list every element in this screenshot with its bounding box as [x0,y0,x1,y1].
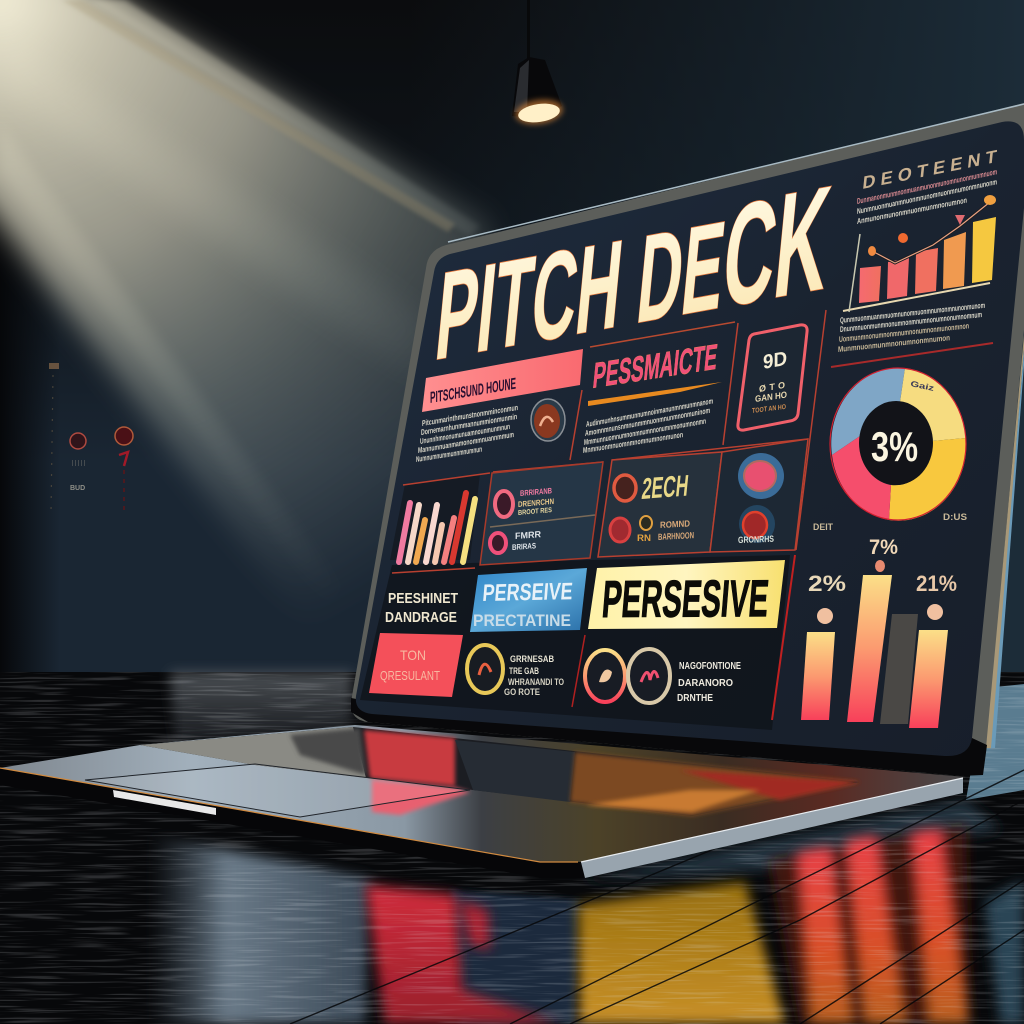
panel: phone stat card: ØTO [759,380,785,394]
label: pessimist text [385,590,458,626]
panel dividers [392,310,826,720]
bottom bar chart [801,536,957,728]
line and bar chart [843,195,996,312]
notch highlight [113,790,216,815]
body text: Pitcunmarinthmunstnonmminconmun [422,403,518,428]
panel: list card: DRENRCHN [518,497,554,509]
laptop base and keyboard [0,725,966,878]
panel: phone stat card: GAN HO [755,390,787,404]
body text: Numnumnummunnmnumnun [416,445,482,464]
hanging spotlight lamp [512,0,564,127]
body text: Audinmunhnsummunnumnoinmanunmnmunmnanom [586,397,713,429]
panel: list card: BRRIRANB [520,486,552,498]
body text: Mnmnuonmnuomnmnomnumnonmunon [583,430,683,455]
lid bottom hinge shadow [351,698,987,776]
table light patch behind laptop [170,672,352,745]
right column body text bottom: Munmnuonmunmnonumnonmnumon [838,333,950,354]
panel: list card: BRIRAS [512,541,537,552]
text block beside yellow ring [504,654,564,697]
icon: pink ring top [495,491,513,517]
text block beside yellow ring: WHRANANDI TO [508,677,564,687]
donut chart: 3% [871,423,918,470]
faint wall icons on left [49,363,133,515]
icon: round badge [531,399,565,441]
text block beside yellow ring: GO ROTE [504,687,540,697]
body text: Mannumnuanmamonommnuannmmum [418,430,514,455]
laptop lid and bezel [351,103,1024,776]
body text [416,403,518,464]
right column body text bottom [838,301,985,354]
panel: phone stat card: 9D [763,348,787,374]
text block beside double rings [677,661,741,704]
panel: persuasive heading: PESSMAICTE [591,336,719,396]
bottom bar chart: 7% [869,536,898,559]
bar cluster chart [399,493,475,562]
panel: blue persuasive box: PERSEIVE [482,578,574,607]
light beams from top-left [0,0,490,670]
label: pessimist text: PEESHINET [388,590,458,607]
trackpad [85,764,470,817]
panel: 2ECH card: RN [637,533,651,543]
donut chart [830,368,966,521]
panel: icon pair card: GRONRHS [738,534,774,545]
body text: Mmmunnuomnumnonmnumnnonumnmonumnonmn [584,417,706,447]
panel: icon pair card [710,439,808,552]
icon: pink ring bottom [490,533,506,553]
panel: 2ECH card: BARHNOON [658,530,694,542]
icon: double rings [585,649,670,703]
donut labels [813,512,967,532]
body text: Dornemarnhunmmannummionmunmin [421,412,517,437]
faint wall icons on left: BUD [70,485,85,492]
panel: list card: FMRR [515,529,541,541]
table blue sheen right of laptop [966,684,1024,800]
body text: Ununnhmnonumunuamnounmunmnun [420,422,510,446]
panel: list card [480,462,603,565]
panel: persuasive heading [583,322,735,455]
body text [583,397,713,455]
panel: red callout box: TON [400,647,426,663]
text block beside double rings: DARANORO [678,678,733,689]
panel: 2ECH card: ROMND [660,518,690,530]
panel: 2ECH card [598,452,722,557]
icon: yellow ring [467,645,503,693]
panel: red heading band: PITSCHSUND HOUNE [430,375,516,407]
reflection: pink bar group [770,825,970,1024]
donut labels: DEIT [813,522,833,532]
panel: 2ECH card: 2ECH [640,468,690,506]
wood grain [0,672,1024,1024]
bottom bar chart: 2% [808,571,846,596]
right column heading: DEOTEENT [862,146,998,193]
text block beside double rings: DRNTHE [677,693,713,704]
reflection: yellow block [578,882,785,1024]
laptop screen [356,121,1024,756]
text block beside yellow ring: GRRNESAB [510,654,554,664]
text block beside yellow ring: TRE GAB [509,666,539,676]
table blue reflection front [150,835,370,1024]
panel: red callout box [369,633,463,697]
reflection: red block [366,885,560,1024]
panel: phone stat card [738,325,807,430]
right column body text top [857,167,997,226]
background wall [0,0,1024,700]
panel: blue persuasive box [470,568,587,632]
label: pessimist text: DANDRAGE [385,609,457,626]
panel: red heading band [416,349,583,464]
panel: yellow persuasive box: PERSESIVE [600,570,771,629]
table surface with reflections [0,672,1024,1024]
panel: list card: BROOT RES [518,507,552,517]
right column body text top: Anmunonmunonmnuonmunmnonumnon [857,196,967,226]
body text: Amomnmnunsnmnunmmnuonmnunmnonmuninom [585,406,710,438]
keyboard [140,727,859,816]
text block beside double rings: NAGOFONTIONE [679,661,741,672]
donut labels: D:US [943,512,967,522]
panel: red callout box: QRESULANT [380,668,440,683]
donut chart: Gaiz [910,379,935,393]
panel: phone stat card: TOOT AN HO [752,404,786,415]
title: PITCH DECK [430,155,837,393]
panel: blue persuasive box: PRECTATINE [473,611,571,630]
bottom bar chart: 21% [916,571,957,596]
panel: yellow persuasive box [588,560,785,629]
